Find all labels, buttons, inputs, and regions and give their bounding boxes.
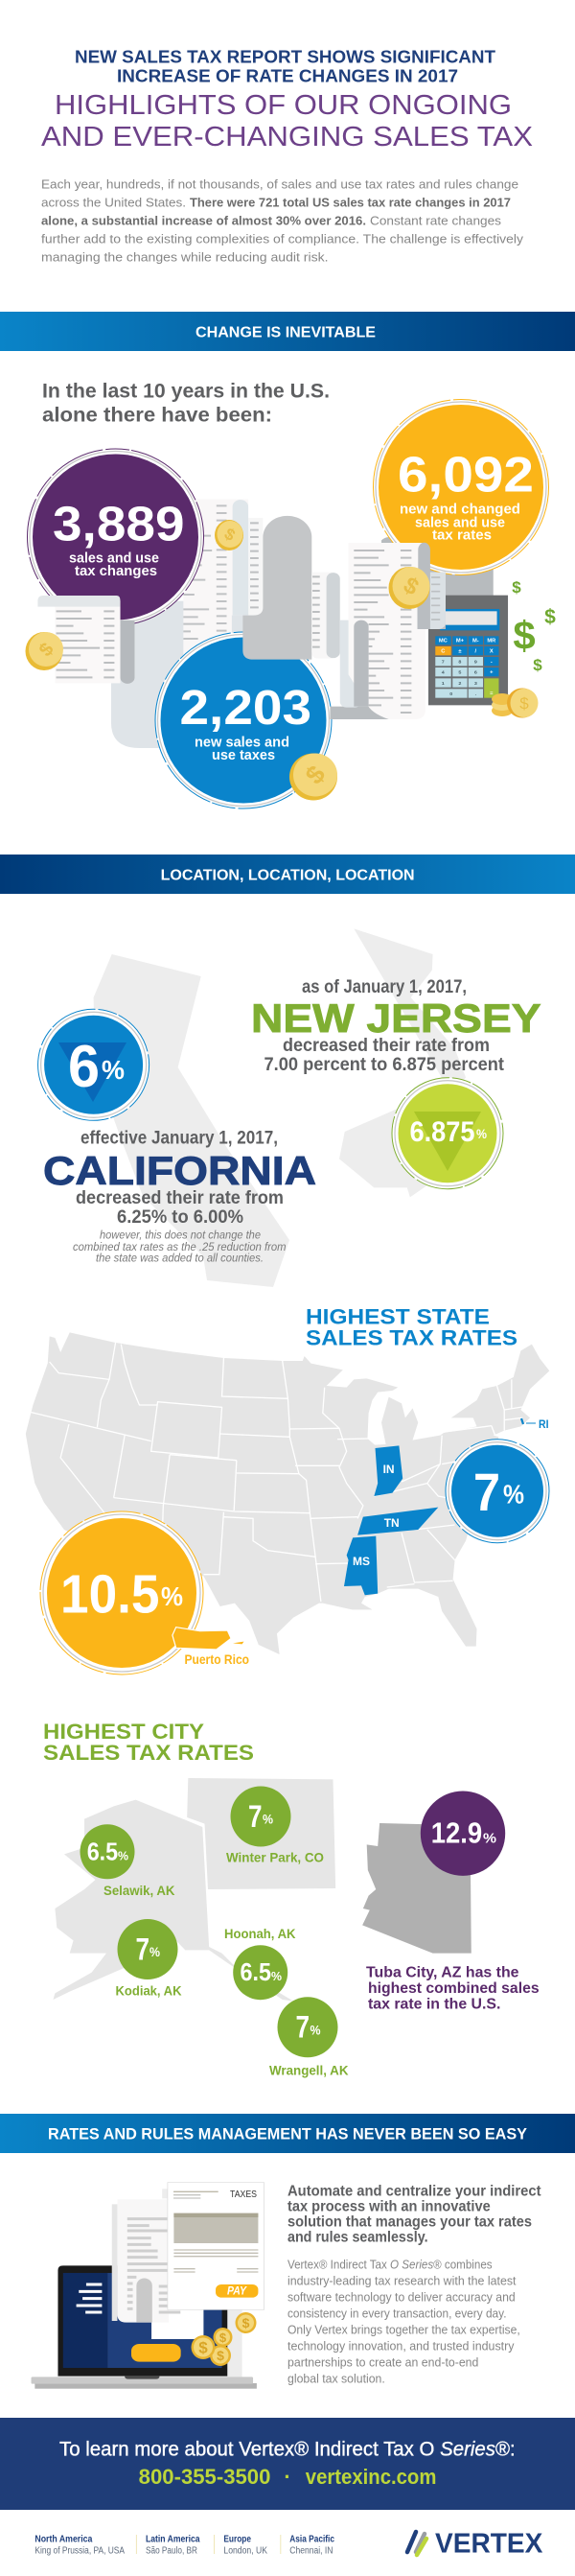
map: Colorado and Alaska: [53, 1778, 335, 2002]
text: California change: combined tax rates as the .25 reduction from: [73, 1242, 287, 1253]
icon: coin upper centre: $: [221, 525, 239, 545]
title: highlights: AND EVER-CHANGING SALES TAX: [41, 122, 533, 152]
rate circle: highest state 7%: 7: [473, 1462, 500, 1522]
map highlight: Puerto Rico: [172, 1628, 249, 1667]
intro paragraph: There were 721 total US sales tax rate changes in 2017: [190, 197, 511, 210]
stat circle: 6,092 new and changed sales and use tax rates: 6,092: [398, 448, 534, 503]
icon: calculator: 1: [442, 681, 445, 687]
rate circle: California 6%: 6: [68, 1034, 100, 1100]
rate marker: Kodiak, AK: %: [150, 1944, 160, 1959]
stat circle: 6,092 new and changed sales and use tax rates: [374, 399, 548, 575]
text: Vertex description: global tax solution.: [288, 2372, 385, 2386]
rate circle: California 6%: %: [102, 1055, 125, 1085]
icon: coin left: [25, 632, 63, 670]
text: PAY button label: PAY: [227, 2284, 247, 2298]
icon: calculator: 0: [449, 691, 452, 697]
icons: green dollar signs: [512, 578, 556, 674]
stat circle: 2,203 new sales and use taxes: [155, 632, 332, 808]
rate circle: highest state 7%: %: [503, 1480, 524, 1510]
section band: rates and rules: RATES AND RULES MANAGEMENT HAS NEVER BEEN SO EASY: [48, 2126, 527, 2143]
icon: calculator: =: [490, 691, 493, 697]
section band: change is inevitable: CHANGE IS INEVITABLE: [196, 324, 376, 340]
rate marker: Hoonah, AK: Hoonah, AK: [224, 1926, 295, 1941]
footer: office locations: North America: [34, 2535, 93, 2545]
icon: calculator: 5: [458, 670, 462, 676]
rate marker: Selawik, AK: [80, 1824, 174, 1898]
rate marker: Tuba City 12.9%: 12.9: [431, 1816, 482, 1850]
text: Vertex description: partnerships to create an end-to-end: [288, 2355, 478, 2370]
text: New Jersey change: [251, 976, 540, 1075]
text: automate headline: tax process with an innovative: [288, 2198, 491, 2214]
intro paragraph: Constant rate changes: [370, 215, 501, 228]
rate circle: highest state 10.5%: [40, 1511, 203, 1674]
icons: gold coins: $: [198, 2338, 208, 2357]
title: report headline: INCREASE OF RATE CHANGES IN 2017: [117, 66, 458, 86]
footer: office locations: King of Prussia, PA, USA: [34, 2546, 125, 2557]
rate marker: Winter Park, CO: [226, 1786, 324, 1865]
icon: calculator: [428, 596, 508, 705]
heading: highest city sales tax rates: SALES TAX RATES: [43, 1741, 254, 1765]
icons: gold coins: $: [217, 2348, 224, 2363]
text: automate headline: and rules seamlessly.: [288, 2229, 428, 2245]
text: California change: decreased their rate from: [76, 1187, 284, 1208]
text: California change: effective January 1, 2017,: [80, 1128, 278, 1149]
rate circle: New Jersey 6.875%: [392, 1078, 503, 1189]
text: California change: CALIFORNIA: [43, 1148, 316, 1193]
icon: coin stack: $: [519, 694, 529, 713]
logo: Vertex: VERTEX: [435, 2529, 543, 2560]
stat circle: 3,889 sales and use tax changes: [27, 449, 203, 625]
icons: green dollar signs: $: [533, 656, 542, 674]
icon: calculator: +: [490, 670, 493, 675]
footer band: call to action: ·: [284, 2465, 291, 2489]
intro paragraph: across the United States.: [41, 197, 186, 210]
title: highlights: [41, 90, 533, 152]
section band: change is inevitable: [0, 312, 575, 351]
icon: coin on blue circle: [289, 754, 337, 800]
icons: gold coins: [192, 2312, 257, 2366]
rate marker: Selawik, AK: Selawik, AK: [104, 1883, 174, 1898]
map: New Jersey silhouette: [339, 928, 466, 1197]
text: California change: the state was added to all counties.: [96, 1253, 264, 1265]
intro paragraph: alone, a substantial increase of almost 30% over 2016.: [41, 215, 366, 228]
icons: green dollar signs: $: [512, 578, 521, 597]
footer: office locations: Latin America: [146, 2535, 200, 2545]
section band: rates and rules: [0, 2114, 575, 2153]
map highlight: Indiana: [374, 1445, 402, 1496]
rate circle: highest state 10.5%: 10.5: [60, 1564, 159, 1626]
rate marker: Wrangell, AK: [269, 1997, 349, 2077]
icon: calculator: 8: [458, 660, 462, 666]
text: Vertex description: software technology to deliver accuracy and: [288, 2290, 516, 2305]
text: automate headline: Automate and centralize your indirect: [288, 2183, 540, 2199]
rate circle: highest state 7%: [446, 1440, 549, 1543]
map label: Rhode Island: [521, 1417, 548, 1431]
icon: calculator: 2: [458, 681, 462, 687]
icon: calculator: 7: [442, 660, 445, 666]
footer: office locations: São Paulo, BR: [146, 2546, 197, 2557]
heading: highest city sales tax rates: [43, 1720, 254, 1765]
stat circle: 3,889 sales and use tax changes: 3,889: [53, 496, 184, 550]
rate marker: Kodiak, AK: [115, 1919, 182, 1999]
rate marker: Winter Park, CO: Winter Park, CO: [226, 1850, 324, 1865]
footer band: call to action: 800-355-3500: [139, 2465, 270, 2489]
illustration: back paper rolls: [111, 500, 494, 748]
illustration: left receipt: [37, 596, 134, 684]
icon: coin stack: [492, 689, 539, 717]
rate marker: Tuba City 12.9%: %: [483, 1831, 496, 1847]
text: Vertex description: Vertex® Indirect Tax O Series® combines: [288, 2258, 493, 2272]
rate marker: Hoonah, AK: 6.5: [240, 1957, 271, 1986]
stat circle: 6,092 new and changed sales and use tax rates: new and changed: [400, 503, 520, 518]
map highlight: Puerto Rico: Puerto Rico: [184, 1651, 249, 1667]
icon: calculator: 3: [474, 681, 477, 687]
map highlight: Tennessee: [357, 1508, 438, 1535]
text: New Jersey change: decreased their rate from: [283, 1035, 490, 1056]
footer: office locations: London, UK: [223, 2546, 267, 2557]
rate marker: Wrangell, AK: 7: [295, 2010, 310, 2045]
icons: green dollar signs: $: [544, 606, 556, 628]
icon: calculator: 6: [474, 670, 477, 676]
icon: calculator: M+: [456, 639, 464, 644]
icons: gold coins: $: [242, 2315, 250, 2330]
footer band: call to action: To learn more about Vertex® Indirect Tax O Series®:: [59, 2439, 516, 2461]
section band: location: [0, 855, 575, 894]
icons: green dollar signs: $: [513, 613, 536, 658]
heading: last 10 years: [42, 380, 330, 426]
title: report headline: [75, 47, 496, 86]
text: Tuba City note: Tuba City, AZ has the: [366, 1965, 519, 1981]
icon: calculator: 9: [474, 660, 477, 666]
text: Vertex description: Only Vertex brings together the tax expertise,: [288, 2323, 520, 2337]
footer: office locations: Europe: [223, 2535, 251, 2545]
text: New Jersey change: as of January 1, 2017,: [302, 976, 467, 997]
heading: highest state sales tax rates: HIGHEST STATE: [306, 1305, 490, 1329]
text: Vertex description: [288, 2258, 520, 2386]
icon: calculator: M-: [472, 639, 479, 644]
text: automate headline: [288, 2183, 540, 2245]
intro paragraph: Each year, hundreds, if not thousands, of sales and use tax rates and rules change: [41, 178, 518, 192]
map: California silhouette: [94, 954, 289, 1287]
icon: coin upper centre: [215, 520, 243, 550]
rate marker: Winter Park, CO: 7: [248, 1799, 263, 1834]
heading: highest state sales tax rates: [306, 1305, 518, 1349]
rate circle: New Jersey 6.875%: %: [476, 1126, 487, 1141]
rate marker: Kodiak, AK: 7: [136, 1932, 150, 1966]
illustration: receipt curl over calculator: [418, 543, 446, 629]
rate marker: Wrangell, AK: %: [310, 2022, 321, 2037]
icon: coin on blue circle: $: [300, 761, 331, 789]
intro paragraph: [41, 178, 524, 265]
rate marker: Hoonah, AK: [224, 1926, 295, 2000]
heading: highest city sales tax rates: HIGHEST CITY: [43, 1720, 204, 1744]
rate marker: Kodiak, AK: Kodiak, AK: [115, 1983, 182, 1999]
rate marker: Tuba City 12.9%: [421, 1791, 505, 1876]
stat circle: 2,203 new sales and use taxes: 2,203: [180, 680, 311, 735]
icon: calculator: C: [441, 649, 445, 655]
stat circle: 2,203 new sales and use taxes: use taxes: [212, 748, 275, 763]
map highlight: Tennessee: TN: [384, 1516, 400, 1530]
illustration: centre and right receipts: [242, 516, 426, 719]
icon: calculator: 4: [442, 670, 445, 676]
icon: calculator: X: [490, 649, 494, 655]
section band: location: LOCATION, LOCATION, LOCATION: [161, 867, 415, 883]
text: New Jersey change: NEW JERSEY: [251, 995, 540, 1041]
text: New Jersey change: 7.00 percent to 6.875 percent: [264, 1054, 504, 1075]
illustration: laptop with tax invoice: [32, 2183, 264, 2389]
icon: coin left: $: [35, 639, 58, 661]
text: Vertex description: consistency in every transaction, every day.: [288, 2307, 506, 2321]
text: Vertex description: industry-leading tax research with the latest: [288, 2274, 517, 2288]
heading: last 10 years: In the last 10 years in the U.S.: [42, 380, 330, 402]
map highlight: Indiana: IN: [383, 1463, 395, 1476]
footer band: call to action: vertexinc.com: [306, 2465, 436, 2489]
heading: last 10 years: alone there have been:: [42, 404, 272, 426]
text: California change: [43, 1128, 316, 1265]
intro paragraph: managing the changes while reducing audit risk.: [41, 251, 328, 265]
icon: calculator: -: [491, 660, 493, 665]
text: California change: however, this does not change the: [100, 1230, 261, 1242]
icon: calculator: ±: [458, 649, 462, 654]
stat circle: 3,889 sales and use tax changes: tax changes: [75, 564, 157, 579]
heading: highest state sales tax rates: SALES TAX RATES: [306, 1325, 518, 1349]
map highlight: Mississippi: [344, 1536, 378, 1595]
map label: Rhode Island: RI: [539, 1417, 548, 1431]
icons: gold coins: $: [219, 2330, 227, 2345]
footer: office locations: [34, 2535, 334, 2557]
rate marker: Selawik, AK: 6.5: [87, 1837, 118, 1865]
stat circle: 6,092 new and changed sales and use tax rates: sales and use: [415, 515, 505, 530]
footer: office locations: Chennai, IN: [289, 2546, 334, 2557]
map: Arizona: [362, 1823, 472, 1954]
stat circle: 6,092 new and changed sales and use tax rates: tax rates: [432, 528, 492, 544]
map highlight: Mississippi: MS: [353, 1555, 370, 1568]
rate circle: highest state 10.5%: %: [161, 1581, 183, 1611]
text: California change: 6.25% to 6.00%: [117, 1206, 243, 1228]
map: continental United States: [26, 1332, 549, 1654]
text: Tuba City note: tax rate in the U.S.: [368, 1996, 500, 2012]
rate circle: New Jersey 6.875%: 6.875: [410, 1116, 475, 1148]
text: TAXES label: TAXES: [230, 2189, 257, 2200]
footer: office locations: Asia Pacific: [289, 2535, 334, 2545]
rate marker: Winter Park, CO: %: [263, 1812, 273, 1827]
footer band: call to action: [0, 2418, 575, 2510]
stat circle: 2,203 new sales and use taxes: new sales and: [195, 736, 289, 751]
text: Vertex description: technology innovation, and trusted industry: [288, 2339, 515, 2354]
rate marker: Hoonah, AK: %: [271, 1969, 282, 1983]
title: highlights: HIGHLIGHTS OF OUR ONGOING: [55, 90, 512, 121]
rate marker: Wrangell, AK: Wrangell, AK: [269, 2062, 349, 2077]
icon: calculator: .: [475, 691, 477, 697]
icon: calculator: MR: [487, 639, 495, 644]
text: automate headline: solution that manages your tax rates: [288, 2213, 532, 2230]
intro paragraph: further add to the existing complexities of compliance. The challenge is effectively: [41, 233, 524, 246]
rate marker: Selawik, AK: %: [118, 1848, 128, 1862]
text: Tuba City note: highest combined sales: [368, 1980, 540, 1997]
rate circle: California 6%: [38, 1009, 150, 1120]
icon: calculator: MC: [439, 639, 448, 644]
text: Tuba City note: [366, 1965, 540, 2012]
title: report headline: NEW SALES TAX REPORT SHOWS SIGNIFICANT: [75, 47, 496, 67]
icon: coin on receipt: [389, 567, 429, 609]
icon: coin on receipt: $: [399, 572, 424, 601]
icon: calculator: /: [475, 649, 477, 655]
stat circle: 3,889 sales and use tax changes: sales and use: [69, 551, 159, 567]
